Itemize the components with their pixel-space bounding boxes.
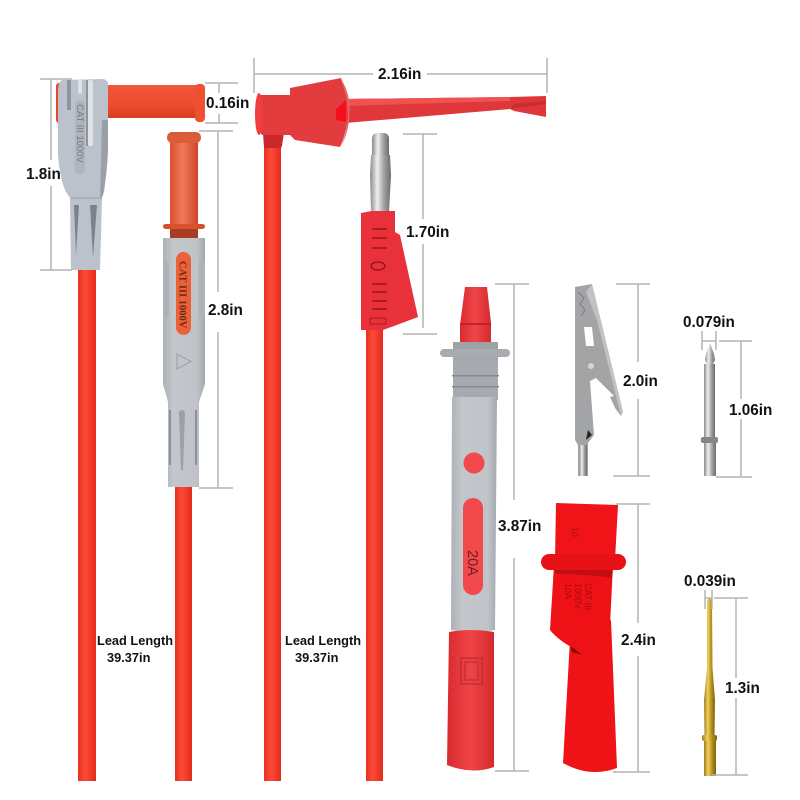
lead length label: right	[285, 633, 361, 665]
dimension: 2.8in: 2.8in	[208, 302, 243, 319]
dimension: 2.16in	[254, 58, 547, 93]
dimension: 0.039in	[684, 573, 736, 609]
lead length label: left: 39.37in	[107, 650, 151, 665]
20A label text: 20A	[464, 550, 480, 576]
lead length label: left	[97, 633, 173, 665]
dimension: 0.16in	[205, 83, 249, 123]
dimension: 1.70in: 1.70in	[406, 224, 449, 241]
dimension: 2.0in: 2.0in	[623, 373, 658, 390]
dimension: 2.0in	[613, 284, 658, 476]
dimension: 1.3in	[712, 598, 760, 775]
dimension: 1.70in	[403, 134, 449, 334]
dimension: 0.079in	[683, 314, 735, 350]
warning triangle mark	[177, 354, 191, 369]
icon: 20A probe	[440, 287, 510, 771]
icon: alligator clip	[575, 284, 623, 476]
dimension: 1.8in	[26, 79, 72, 270]
cable: straight probe lead	[175, 485, 192, 781]
cable: banana plug lead	[366, 328, 383, 781]
dimension: 2.8in	[199, 131, 243, 488]
lead length label: right: Lead Length	[285, 633, 361, 648]
icon: red insulated clip boot: 1000V	[573, 583, 583, 609]
boot marking: 10	[570, 527, 580, 537]
dimension: 1.8in: 1.8in	[26, 166, 61, 183]
dimension: 3.87in: 3.87in	[498, 518, 541, 535]
icon: red insulated clip boot: 10A	[563, 583, 573, 599]
icon: stackable banana plug	[361, 133, 418, 330]
icon: gold pin tip	[702, 598, 717, 776]
dimension: 0.079in: 0.079in	[683, 314, 735, 331]
dimension: 1.06in	[716, 341, 772, 477]
lead length label: left: Lead Length	[97, 633, 173, 648]
cable: angled plug lead	[78, 268, 96, 781]
probe label text: CAT III 1000V	[176, 261, 188, 329]
icon: straight probe with orange tip	[163, 132, 205, 487]
dimension: 0.039in: 0.039in	[684, 573, 736, 590]
dimension: 0.16in: 0.16in	[206, 95, 249, 112]
boot label text: CAT III	[583, 583, 593, 610]
icon: red hook clip	[255, 78, 546, 148]
plug label text: CAT III 1000V	[74, 104, 85, 163]
dimension: 1.06in: 1.06in	[729, 402, 772, 419]
icon: right-angle plug	[56, 79, 205, 270]
icon: silver pin tip	[701, 343, 718, 476]
dimension: 2.4in: 2.4in	[621, 632, 656, 649]
dimension: 2.4in	[613, 504, 656, 772]
dimension: 2.16in: 2.16in	[378, 66, 421, 83]
lead length label: right: 39.37in	[295, 650, 339, 665]
icon: red insulated clip boot	[541, 503, 626, 772]
dimension: 1.3in: 1.3in	[725, 680, 760, 697]
cable: hook clip lead	[264, 140, 281, 781]
dimension: 3.87in	[495, 284, 541, 771]
